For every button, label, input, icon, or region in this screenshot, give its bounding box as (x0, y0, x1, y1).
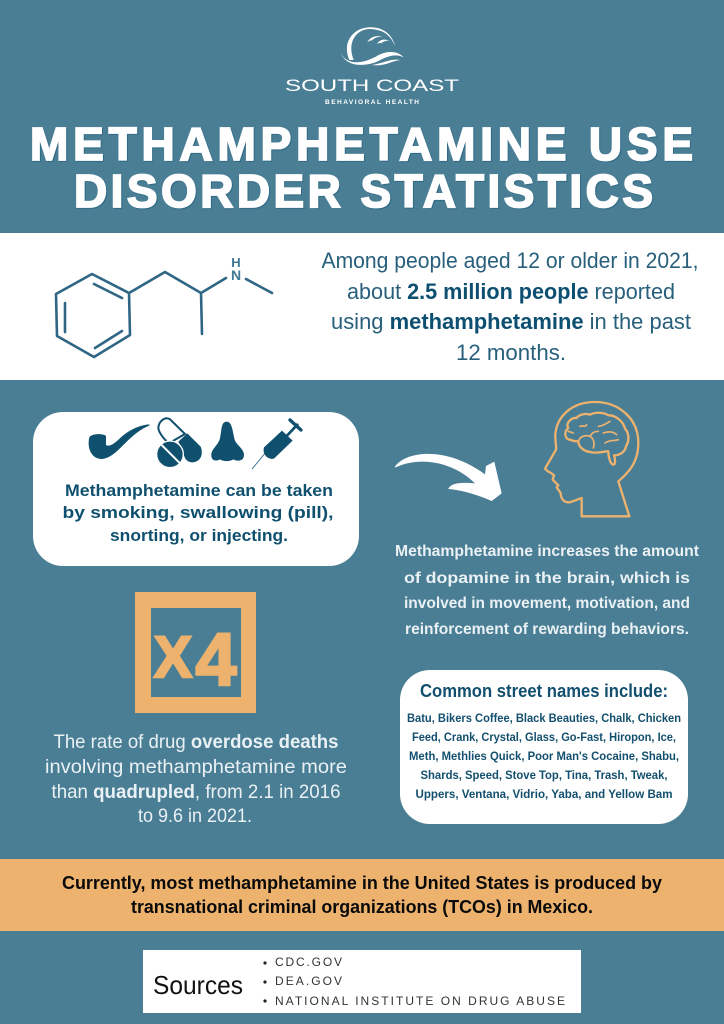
intro text: about 2.5 million people reported (347, 279, 675, 304)
icon: pipe (89, 424, 149, 459)
panel: sources: Sources (153, 970, 243, 1000)
street names list: Feed, Crank, Crystal, Glass, Go-Fast, Hiropon, Ice, (412, 730, 676, 744)
icon: pills (157, 418, 202, 468)
intro text: using methamphetamine in the past (331, 309, 691, 334)
overdose text (45, 731, 347, 827)
title: METHAMPHETAMINE USE (30, 118, 693, 170)
routes text: Methamphetamine can be taken (65, 481, 333, 500)
dopamine text: Methamphetamine increases the amount (395, 543, 699, 560)
overdose text: The rate of drug overdose deaths (54, 731, 339, 753)
icon: x4 box: X (154, 625, 192, 690)
title: DISORDER STATISTICS (74, 165, 653, 217)
panel: production band (0, 859, 724, 931)
icon: methamphetamine molecule: H (231, 255, 241, 270)
dopamine text: of dopamine in the brain, which is (404, 570, 690, 587)
dopamine text: involved in movement, motivation, and (404, 595, 690, 612)
street names list: Meth, Methlies Quick, Poor Man's Cocaine, Shabu, (409, 749, 679, 763)
street names list (407, 711, 681, 801)
source list: NATIONAL INSTITUTE ON DRUG ABUSE (275, 994, 565, 1008)
logo: South Coast Behavioral Health: SOUTH COAST (285, 76, 459, 95)
street names list: Uppers, Ventana, Vidrio, Yaba, and Yellow Bam (416, 787, 672, 801)
icon: x4 box (135, 592, 256, 713)
routes text (62, 481, 334, 545)
panel: production band: transnational criminal organizations (TCOs) in Mexico. (131, 897, 593, 917)
icon: syringe (252, 420, 301, 469)
street names list: Shards, Speed, Stove Top, Tina, Trash, Tweak, (420, 768, 668, 782)
panel: street names (400, 670, 688, 824)
panel: routes of use (33, 412, 359, 566)
routes text: snorting, or injecting. (110, 526, 288, 545)
logo: South Coast Behavioral Health (285, 27, 459, 106)
intro text: 12 months. (456, 340, 566, 365)
panel: production band: Currently, most methamphetamine in the United States is produced by (62, 873, 662, 893)
intro text (322, 248, 698, 365)
dopamine text: reinforcement of rewarding behaviors. (405, 621, 689, 638)
intro text: Among people aged 12 or older in 2021, (322, 248, 698, 273)
routes text: by smoking, swallowing (pill), (62, 503, 334, 522)
arrow (395, 454, 502, 501)
title (30, 118, 693, 217)
icon: nose (211, 422, 244, 461)
panel: intro band (0, 233, 724, 380)
overdose text: than quadrupled, from 2.1 in 2016 (52, 781, 340, 803)
overdose text: to 9.6 in 2021. (138, 805, 252, 827)
dopamine text (395, 543, 699, 638)
panel: sources (143, 950, 581, 1013)
source list: CDC.GOV (275, 955, 342, 969)
icon: methamphetamine molecule: N (231, 267, 241, 283)
icon: methamphetamine molecule (56, 255, 272, 357)
overdose text: involving methamphetamine more (45, 756, 347, 778)
panel: street names: Common street names include: (420, 681, 668, 701)
icon: x4 box: 4 (196, 618, 236, 701)
icon: head with brain (545, 402, 638, 516)
logo: South Coast Behavioral Health: BEHAVIORAL HEALTH (325, 99, 419, 106)
street names list: Batu, Bikers Coffee, Black Beauties, Chalk, Chicken (407, 711, 681, 725)
source list: DEA.GOV (275, 974, 342, 988)
source list (263, 955, 565, 1008)
